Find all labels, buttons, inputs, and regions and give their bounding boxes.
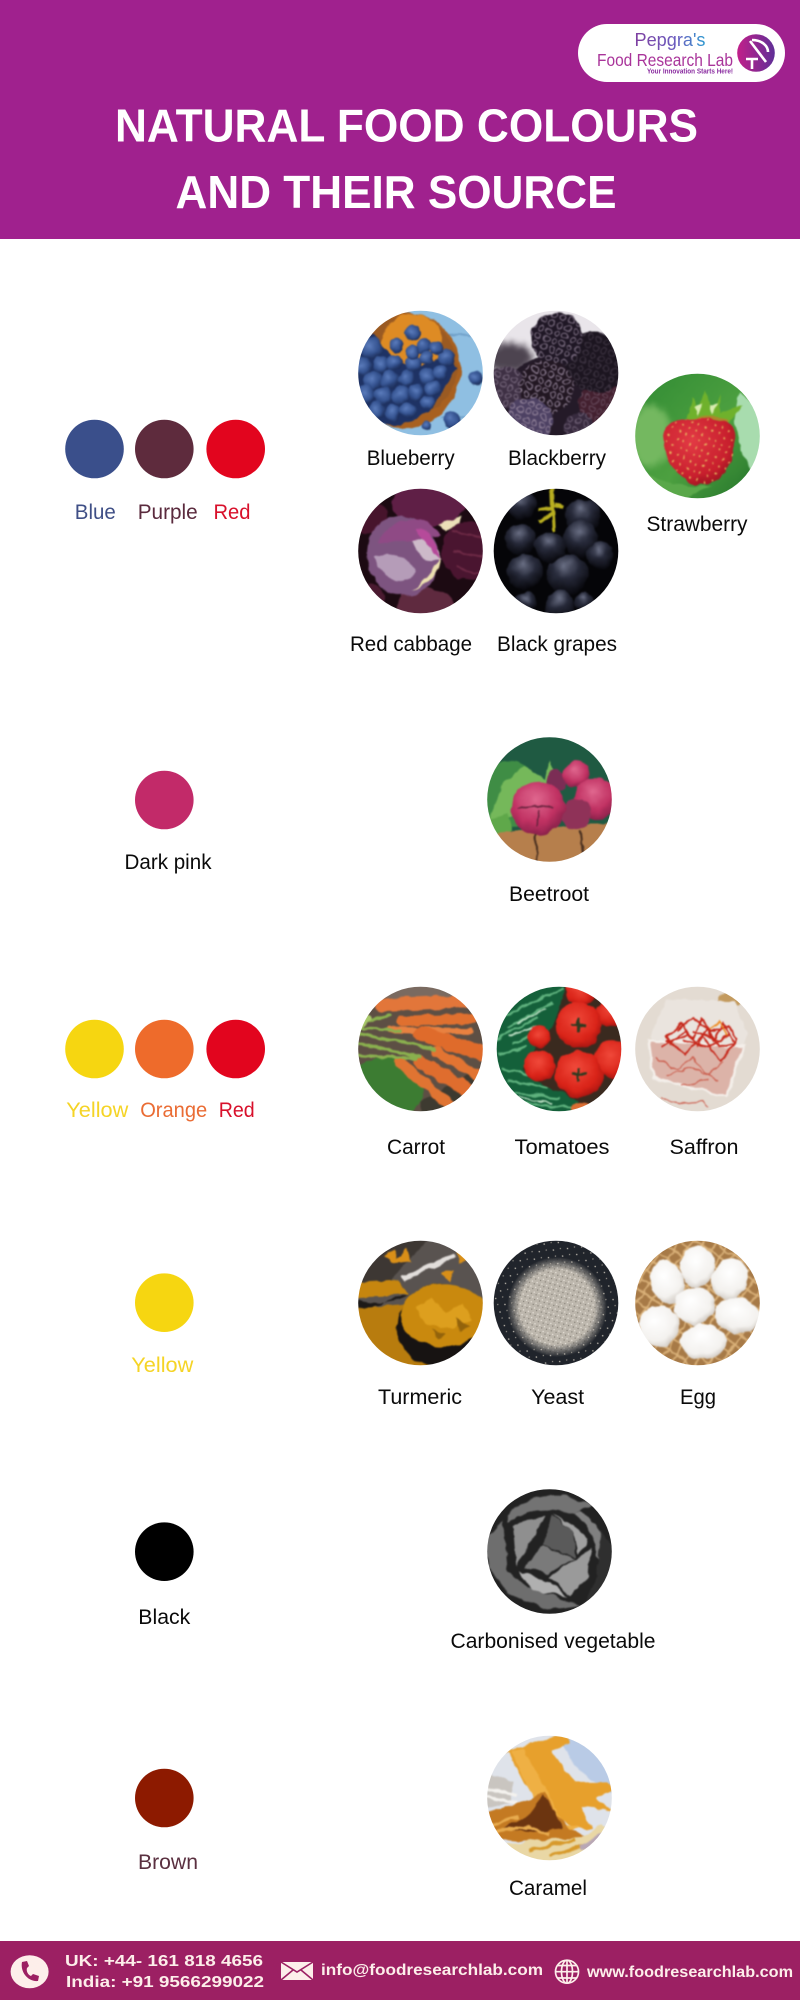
label: source names [350, 446, 748, 656]
logo [578, 24, 785, 82]
text: email: info@foodresearchlab.com [321, 1962, 543, 1979]
text: phone numbers: UK: +44- 161 818 4656 [65, 1953, 263, 1970]
label: source names: Yeast [531, 1385, 584, 1409]
label: source names: Egg [680, 1385, 716, 1409]
text: phone numbers [65, 1953, 264, 1991]
row: black [135, 1486, 656, 1653]
label: source names: Tomatoes [514, 1135, 610, 1159]
row: brown [135, 1732, 615, 1900]
text: phone numbers: India: +91 9566299022 [66, 1974, 264, 1991]
row: black: Black [138, 1605, 191, 1629]
logo: Pepgra's [634, 29, 706, 50]
photo: carbonised vegetable [484, 1486, 615, 1617]
row: yellow [131, 1237, 763, 1409]
swatch group: blue purple red: Red [214, 500, 250, 524]
swatch group: yellow orange red: Orange [140, 1098, 207, 1122]
photo: turmeric [355, 1237, 487, 1369]
label: source names: Blackberry [508, 446, 606, 470]
label: source names: Strawberry [646, 512, 748, 536]
row: dark pink: Dark pink [124, 850, 212, 874]
label: source names: Turmeric [378, 1385, 462, 1409]
icon: mail [281, 1962, 313, 1980]
row: yellow: Yellow [131, 1353, 194, 1377]
row: brown: Brown [138, 1850, 198, 1874]
label: source names: Saffron [670, 1135, 738, 1159]
photo: egg [632, 1237, 763, 1369]
logo: Your Innovation Starts Here! [647, 68, 733, 76]
label: source names: Red cabbage [350, 632, 472, 656]
row: yellow orange red [65, 977, 763, 1159]
photo: strawberry [635, 374, 760, 498]
swatch group: blue purple red: Purple [138, 500, 198, 524]
footer contact bar [0, 1941, 800, 2000]
logo: Food Research Lab [597, 50, 733, 70]
photo: black grapes [494, 488, 618, 614]
row: blue purple red colours and sources [65, 307, 763, 656]
swatch group: blue purple red: Blue [75, 500, 116, 524]
photo: carrot [358, 986, 483, 1112]
icon: globe [556, 1960, 578, 1983]
header banner [0, 0, 800, 239]
swatch group: yellow orange red: Yellow [66, 1098, 129, 1122]
label: source names: Carrot [387, 1135, 445, 1159]
row: dark pink [124, 734, 616, 906]
icon: phone [11, 1955, 49, 1988]
photo: blueberry [358, 310, 483, 436]
row: dark pink: Beetroot [509, 882, 589, 906]
photo: tomatoes [496, 986, 622, 1112]
label: source names: Blueberry [367, 446, 455, 470]
photo: beetroot [487, 737, 612, 862]
label: source names: Black grapes [497, 632, 617, 656]
swatch group: yellow orange red [65, 1020, 265, 1122]
label: source names [387, 1135, 738, 1159]
photo: red cabbage [358, 488, 483, 614]
row: brown: Caramel [509, 1876, 587, 1900]
photo: caramel [484, 1732, 615, 1864]
photo: yeast [493, 1240, 619, 1366]
swatch group: yellow orange red: Red [219, 1098, 255, 1122]
label: source names [378, 1385, 716, 1409]
title: AND THEIR SOURCE [176, 166, 616, 218]
photo: blackberry [494, 310, 618, 436]
title: NATURAL FOOD COLOURS [115, 100, 698, 152]
photo: saffron [632, 983, 763, 1115]
text: website: www.foodresearchlab.com [586, 1964, 793, 1981]
title [115, 100, 698, 218]
row: black: Carbonised vegetable [450, 1629, 656, 1653]
swatch group: blue purple red [65, 420, 265, 524]
